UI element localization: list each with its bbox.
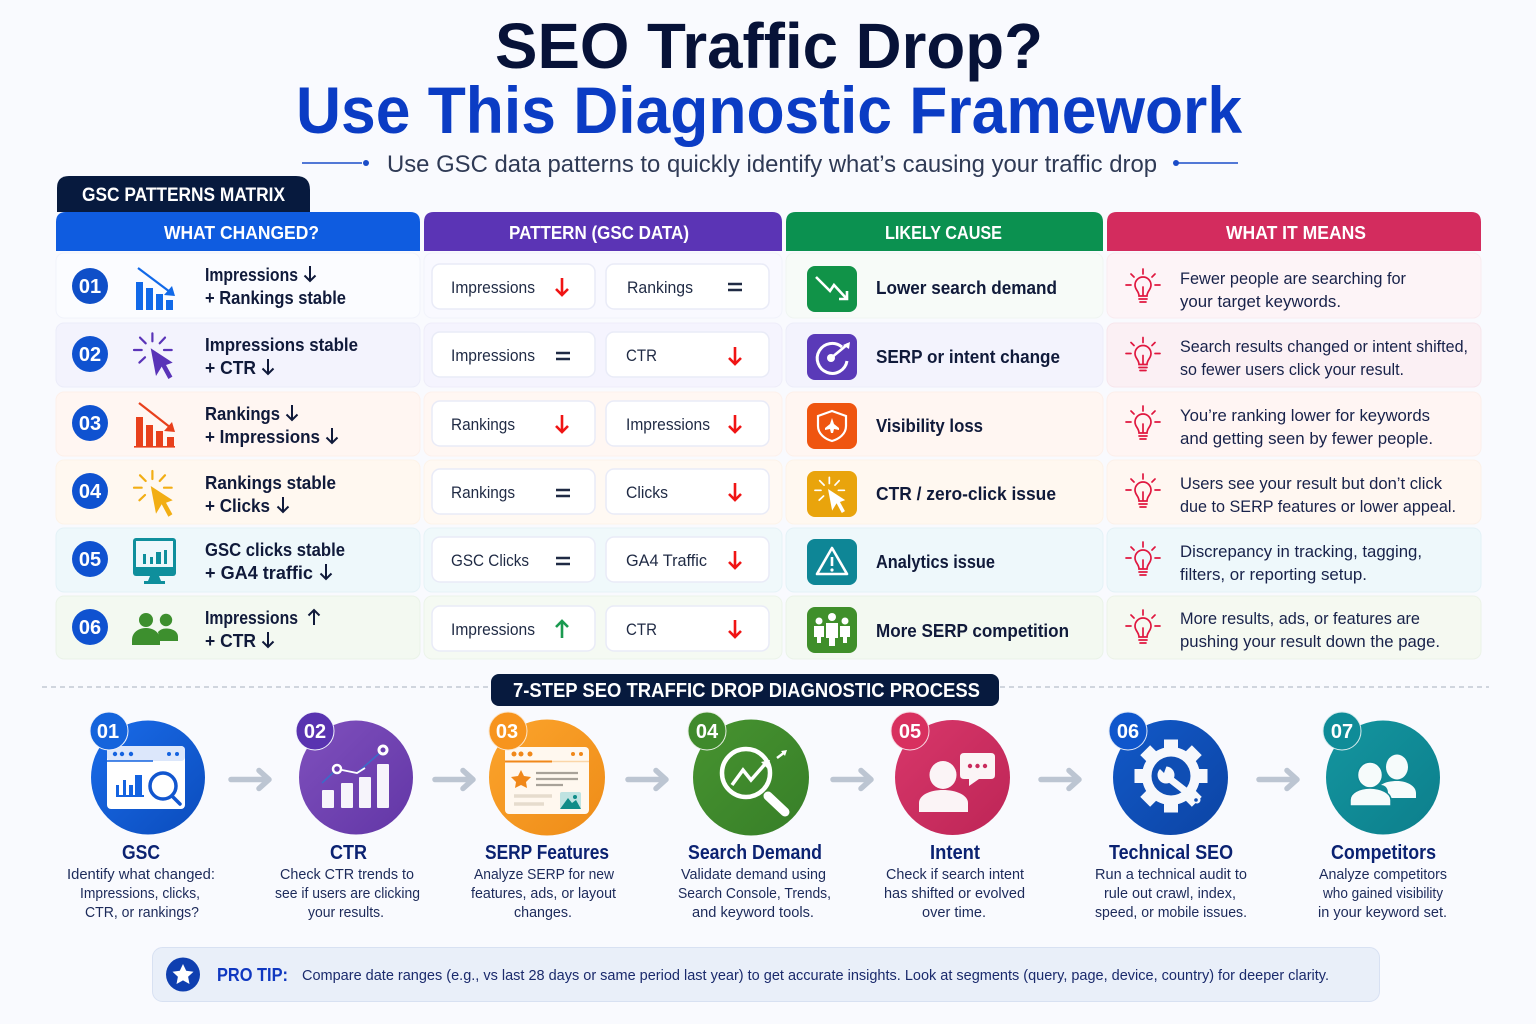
pill: ga4 traffic down xyxy=(606,537,769,582)
meaning text xyxy=(1180,337,1468,379)
row 01 xyxy=(56,253,1481,318)
meaning text: Search results changed or intent shifted, xyxy=(1180,337,1468,356)
step 01 description: CTR, or rankings? xyxy=(85,904,199,921)
step 06 circle icon xyxy=(1113,720,1228,835)
step 01 circle icon xyxy=(91,720,205,834)
step 01: GSC xyxy=(67,712,215,921)
step 07: Competitors xyxy=(1318,712,1447,921)
number badge 06 xyxy=(72,609,108,645)
step 07 title: Competitors xyxy=(1331,842,1436,864)
text: gsc clicks stable, ga4 traffic down: + GA4 traffic xyxy=(205,562,313,583)
step 02: CTR xyxy=(275,712,420,921)
text: rankings down, impressions down xyxy=(205,403,338,447)
icon: target xyxy=(807,334,857,380)
step 01 badge: 01 xyxy=(97,721,119,743)
cause: ctr zero-click issue: CTR / zero-click issue xyxy=(876,483,1056,504)
text: rankings down, impressions down: + Impressions xyxy=(205,426,320,447)
number badge 05: 05 xyxy=(79,549,101,571)
step 04 description: Search Console, Trends, xyxy=(678,885,831,902)
pro tip label: PRO TIP: xyxy=(217,965,288,985)
number badge 03 xyxy=(72,405,108,441)
icon: bulb xyxy=(1126,474,1160,507)
number badge 04: 04 xyxy=(79,481,102,503)
row 02 xyxy=(56,323,1481,387)
step 07 description: in your keyword set. xyxy=(1318,904,1447,921)
step 01 badge xyxy=(90,712,128,750)
cause: serp or intent change: SERP or intent change xyxy=(876,346,1060,367)
pill: rankings equal xyxy=(606,264,769,309)
icon: red falling bars xyxy=(134,403,175,448)
process banner xyxy=(491,674,999,706)
process banner: 7-STEP SEO TRAFFIC DROP DIAGNOSTIC PROCESS xyxy=(513,680,980,702)
pro tip callout xyxy=(152,948,1380,1002)
number badge 06: 06 xyxy=(79,617,101,639)
text: impressions up, ctr down: + CTR xyxy=(205,630,256,651)
pill: rankings down xyxy=(432,401,595,446)
text: rankings stable, clicks down: Rankings stable xyxy=(205,472,336,493)
row 04 xyxy=(56,460,1481,524)
meaning text: filters, or reporting setup. xyxy=(1180,565,1367,584)
step 06: Technical SEO xyxy=(1095,712,1247,921)
pill: rankings equal xyxy=(432,469,595,514)
meaning text: your target keywords. xyxy=(1180,292,1341,311)
step 05 badge xyxy=(891,712,929,750)
step 05 description xyxy=(884,866,1025,921)
pill: rankings equal: Rankings xyxy=(451,484,515,502)
number badge 02: 02 xyxy=(79,344,101,366)
icon: bulb xyxy=(1126,338,1160,370)
cause: visibility loss: Visibility loss xyxy=(876,415,983,436)
matrix tab xyxy=(57,176,310,212)
step 04 badge: 04 xyxy=(696,721,719,743)
step 03 badge xyxy=(489,712,527,750)
step 01 description: Identify what changed: xyxy=(67,866,215,883)
pro tip text: Compare date ranges (e.g., vs last 28 days or same period last year) to get accurate insights. Look at segments (query, page, device, country) for deeper clarity. xyxy=(302,967,1329,984)
number badge 01 xyxy=(72,268,108,304)
step 02 description xyxy=(275,866,420,921)
step 02 badge xyxy=(296,712,334,750)
title xyxy=(296,10,1242,147)
icon: three people xyxy=(807,607,857,653)
step 05 description: over time. xyxy=(922,904,986,921)
cause: analytics issue: Analytics issue xyxy=(876,551,995,572)
meaning text: due to SERP features or lower appeal. xyxy=(1180,497,1456,516)
number badge 02 xyxy=(72,336,108,372)
step 06 description: rule out crawl, index, xyxy=(1104,885,1236,902)
arrow 3 to 4 xyxy=(628,770,666,788)
column header: what changed: WHAT CHANGED? xyxy=(164,223,319,243)
step 07 description xyxy=(1318,866,1447,921)
step 06 description: speed, or mobile issues. xyxy=(1095,904,1247,921)
pill: ga4 traffic down: GA4 Traffic xyxy=(626,552,707,570)
step 05 circle icon xyxy=(895,720,1010,835)
step 05 description: has shifted or evolved xyxy=(884,885,1025,902)
icon: bulb xyxy=(1126,610,1160,643)
step 02 badge: 02 xyxy=(304,721,326,743)
meaning text xyxy=(1180,609,1440,651)
text: impressions stable, ctr down: + CTR xyxy=(205,357,256,378)
step 01 description: Impressions, clicks, xyxy=(80,885,200,902)
icon: yellow click cursor xyxy=(134,471,173,517)
step 03 description: features, ads, or layout xyxy=(471,885,617,902)
column header: what it means xyxy=(1107,212,1481,251)
pill: impressions up: Impressions xyxy=(451,621,535,639)
step 03 badge: 03 xyxy=(496,721,518,743)
number badge 04 xyxy=(72,473,108,509)
text: impressions stable, ctr down: Impressions stable xyxy=(205,334,358,355)
step 06 description xyxy=(1095,866,1247,921)
matrix tab: GSC PATTERNS MATRIX xyxy=(82,185,285,206)
meaning text xyxy=(1180,474,1456,516)
meaning text: so fewer users click your result. xyxy=(1180,360,1404,379)
pill: rankings down: Rankings xyxy=(451,416,515,434)
pill: rankings equal: Rankings xyxy=(627,279,693,297)
pill: impressions down xyxy=(432,264,595,309)
step 02 description: your results. xyxy=(308,904,384,921)
step 01 title: GSC xyxy=(122,842,160,864)
meaning text: Users see your result but don’t click xyxy=(1180,474,1442,493)
pill: impressions down: Impressions xyxy=(626,416,710,434)
icon: green people xyxy=(132,613,178,645)
pill: ctr down: CTR xyxy=(626,621,657,639)
column header: what changed xyxy=(56,212,420,251)
step 06 description: Run a technical audit to xyxy=(1095,866,1247,883)
step 06 badge xyxy=(1109,712,1147,750)
step 02 circle icon xyxy=(299,720,413,834)
text: impressions down, rankings stable: Impressions xyxy=(205,264,298,285)
step 04 circle icon xyxy=(693,720,809,836)
title: SEO Traffic Drop? xyxy=(495,10,1043,82)
step 05 description: Check if search intent xyxy=(886,866,1025,883)
step 07 badge xyxy=(1323,712,1361,750)
row 05 xyxy=(56,528,1481,592)
pill: impressions equal xyxy=(432,332,595,377)
row 03 xyxy=(56,392,1481,456)
step 03 description: changes. xyxy=(514,904,572,921)
pill: ctr down: CTR xyxy=(626,347,657,365)
step 05: Intent xyxy=(884,712,1025,921)
text: gsc clicks stable, ga4 traffic down: GSC clicks stable xyxy=(205,539,345,560)
icon: analytics monitor xyxy=(133,538,176,584)
step 01 description xyxy=(67,866,215,921)
step 07 description: Analyze competitors xyxy=(1319,866,1447,883)
pill: clicks down: Clicks xyxy=(626,484,668,502)
pill: gsc clicks equal xyxy=(432,537,595,582)
pill: impressions down xyxy=(606,401,769,446)
icon: purple click cursor xyxy=(134,333,173,379)
step 04 title: Search Demand xyxy=(688,842,822,864)
step 02 description: see if users are clicking xyxy=(275,885,420,902)
step 04 badge xyxy=(688,712,726,750)
pill: gsc clicks equal: GSC Clicks xyxy=(451,552,529,570)
pill: ctr down xyxy=(606,606,769,651)
cause: more serp competition: More SERP competition xyxy=(876,620,1069,641)
step 07 badge: 07 xyxy=(1331,721,1353,743)
arrow 4 to 5 xyxy=(833,770,871,788)
column header: what it means: WHAT IT MEANS xyxy=(1226,223,1366,243)
step 03 description: Analyze SERP for new xyxy=(474,866,614,883)
step 02 title: CTR xyxy=(330,842,367,864)
meaning text: pushing your result down the page. xyxy=(1180,632,1440,651)
step 02 description: Check CTR trends to xyxy=(280,866,414,883)
step 04 description: Validate demand using xyxy=(681,866,826,883)
step 05 badge: 05 xyxy=(899,721,921,743)
icon: white click on yellow xyxy=(807,471,857,517)
pill: ctr down xyxy=(606,332,769,377)
icon: bulb xyxy=(1126,406,1160,439)
meaning text: More results, ads, or features are xyxy=(1180,609,1420,628)
arrow 2 to 3 xyxy=(435,770,473,788)
subtitle: Use GSC data patterns to quickly identify what’s causing your traffic drop xyxy=(387,151,1157,178)
text: rankings stable, clicks down xyxy=(205,472,336,516)
number badge 03: 03 xyxy=(79,413,101,435)
meaning text: and getting seen by fewer people. xyxy=(1180,429,1433,448)
step 04: Search Demand xyxy=(678,712,831,921)
icon: blue falling bars xyxy=(136,268,175,310)
icon: bulb xyxy=(1126,542,1160,575)
pill: impressions equal: Impressions xyxy=(451,347,535,365)
step 06 title: Technical SEO xyxy=(1109,842,1233,864)
arrow 6 to 7 xyxy=(1259,770,1297,788)
step 03 circle icon xyxy=(489,720,605,836)
step 04 description xyxy=(678,866,831,921)
icon: bulb xyxy=(1126,269,1160,302)
step 07 circle icon xyxy=(1326,720,1440,834)
row 06 xyxy=(56,596,1481,659)
pill: impressions down: Impressions xyxy=(451,279,535,297)
column header: pattern: PATTERN (GSC DATA) xyxy=(509,223,689,243)
text: gsc clicks stable, ga4 traffic down xyxy=(205,539,345,583)
text: impressions up, ctr down xyxy=(205,607,320,651)
meaning text: You’re ranking lower for keywords xyxy=(1180,406,1430,425)
arrow 1 to 2 xyxy=(231,770,269,788)
pill: clicks down xyxy=(606,469,769,514)
icon: shield xyxy=(807,403,857,449)
icon: star badge xyxy=(166,958,200,992)
pill: impressions up xyxy=(432,606,595,651)
number badge 01: 01 xyxy=(79,276,101,298)
text: impressions down, rankings stable: + Rankings stable xyxy=(205,287,346,308)
meaning text: Discrepancy in tracking, tagging, xyxy=(1180,542,1422,561)
arrow 5 to 6 xyxy=(1041,770,1079,788)
meaning text xyxy=(1180,542,1422,584)
cause: lower search demand: Lower search demand xyxy=(876,277,1057,298)
column header: likely cause xyxy=(786,212,1103,251)
column header: pattern xyxy=(424,212,782,251)
meaning text: Fewer people are searching for xyxy=(1180,269,1406,288)
step 04 description: and keyword tools. xyxy=(692,904,814,921)
step 07 description: who gained visibility xyxy=(1322,885,1443,902)
icon: trend down xyxy=(807,266,857,312)
step 06 badge: 06 xyxy=(1117,721,1139,743)
step 05 title: Intent xyxy=(930,842,980,864)
meaning text xyxy=(1180,269,1406,311)
step 03 description xyxy=(471,866,617,921)
text: impressions down, rankings stable xyxy=(205,264,346,308)
number badge 05 xyxy=(72,541,108,577)
step 03: SERP Features xyxy=(471,712,617,921)
meaning text xyxy=(1180,406,1433,448)
text: impressions up, ctr down: Impressions xyxy=(205,607,298,628)
column header: likely cause: LIKELY CAUSE xyxy=(885,223,1002,243)
text: impressions stable, ctr down xyxy=(205,334,358,378)
text: rankings stable, clicks down: + Clicks xyxy=(205,495,270,516)
step 03 title: SERP Features xyxy=(485,842,609,864)
text: rankings down, impressions down: Rankings xyxy=(205,403,280,424)
title: Use This Diagnostic Framework xyxy=(296,73,1242,147)
icon: warning triangle xyxy=(807,539,857,585)
